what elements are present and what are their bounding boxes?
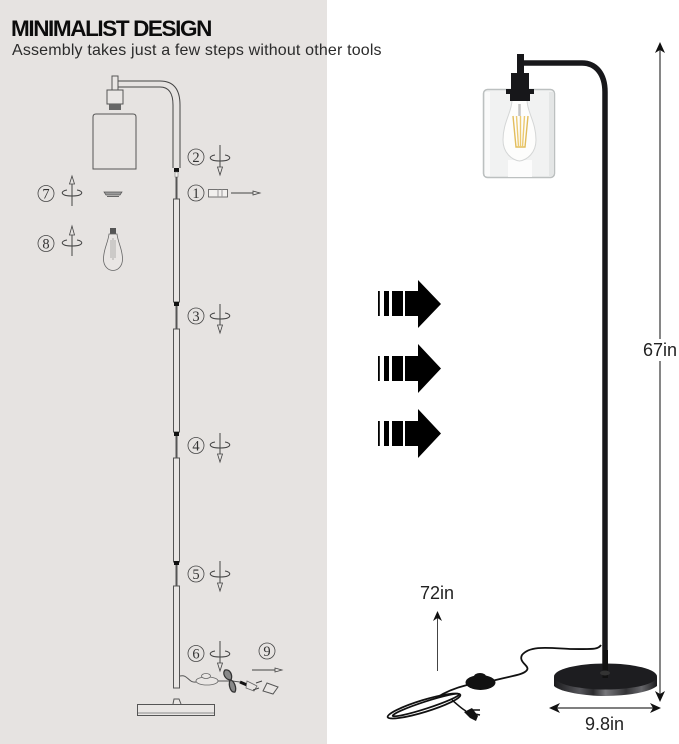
panel: assembly background (0, 0, 327, 744)
plug (452, 700, 480, 721)
dimension: height (643, 42, 677, 702)
step 6: 6 (192, 646, 200, 662)
subtitle: Assembly takes just a few steps without other tools (12, 42, 382, 59)
glass shade (484, 90, 554, 178)
lamp base (138, 699, 214, 716)
bulb outline (104, 228, 122, 270)
dimension: cord length (420, 583, 454, 671)
step 5: 5 (192, 567, 200, 583)
glass shade outline (93, 114, 136, 169)
step 4: 4 (192, 438, 200, 454)
step 2: 2 (192, 150, 200, 166)
step 9: 9 (263, 644, 271, 660)
dimension: base width (549, 703, 661, 734)
socket (506, 54, 534, 101)
step 2 (188, 145, 230, 175)
diagram: exploded lamp (38, 76, 282, 716)
lamp base (554, 650, 657, 696)
dimension: height: 67in (643, 340, 677, 360)
bulb (503, 100, 536, 161)
step 4 (188, 433, 230, 462)
step 8 (38, 226, 82, 256)
step 1: 1 (192, 186, 200, 202)
dimension: cord length: 72in (420, 583, 454, 603)
retaining ring (104, 192, 122, 196)
lamp arm and socket (107, 76, 180, 168)
arrow 3 (378, 409, 441, 458)
step 3: 3 (192, 309, 200, 325)
foot switch (466, 673, 496, 690)
step 5 (188, 561, 230, 591)
cord, foot switch and plug (180, 670, 278, 694)
arrow 2 (378, 344, 441, 393)
step 6 (188, 641, 230, 671)
arm and pole (523, 63, 605, 672)
power cord (492, 645, 601, 681)
product: black floor lamp (386, 54, 657, 723)
step 8: 8 (42, 236, 50, 252)
arrows: three pointing right (378, 280, 441, 458)
step 9 (252, 643, 282, 672)
step 3 (188, 304, 230, 333)
step 7: 7 (42, 186, 50, 202)
step 7 (38, 176, 82, 206)
title: MINIMALIST DESIGN (11, 16, 211, 41)
arrow 1 (378, 280, 441, 328)
step 1 (188, 185, 260, 202)
dimension: base width: 9.8in (585, 714, 624, 734)
coiled cable (386, 685, 467, 723)
pole segments (174, 168, 180, 688)
